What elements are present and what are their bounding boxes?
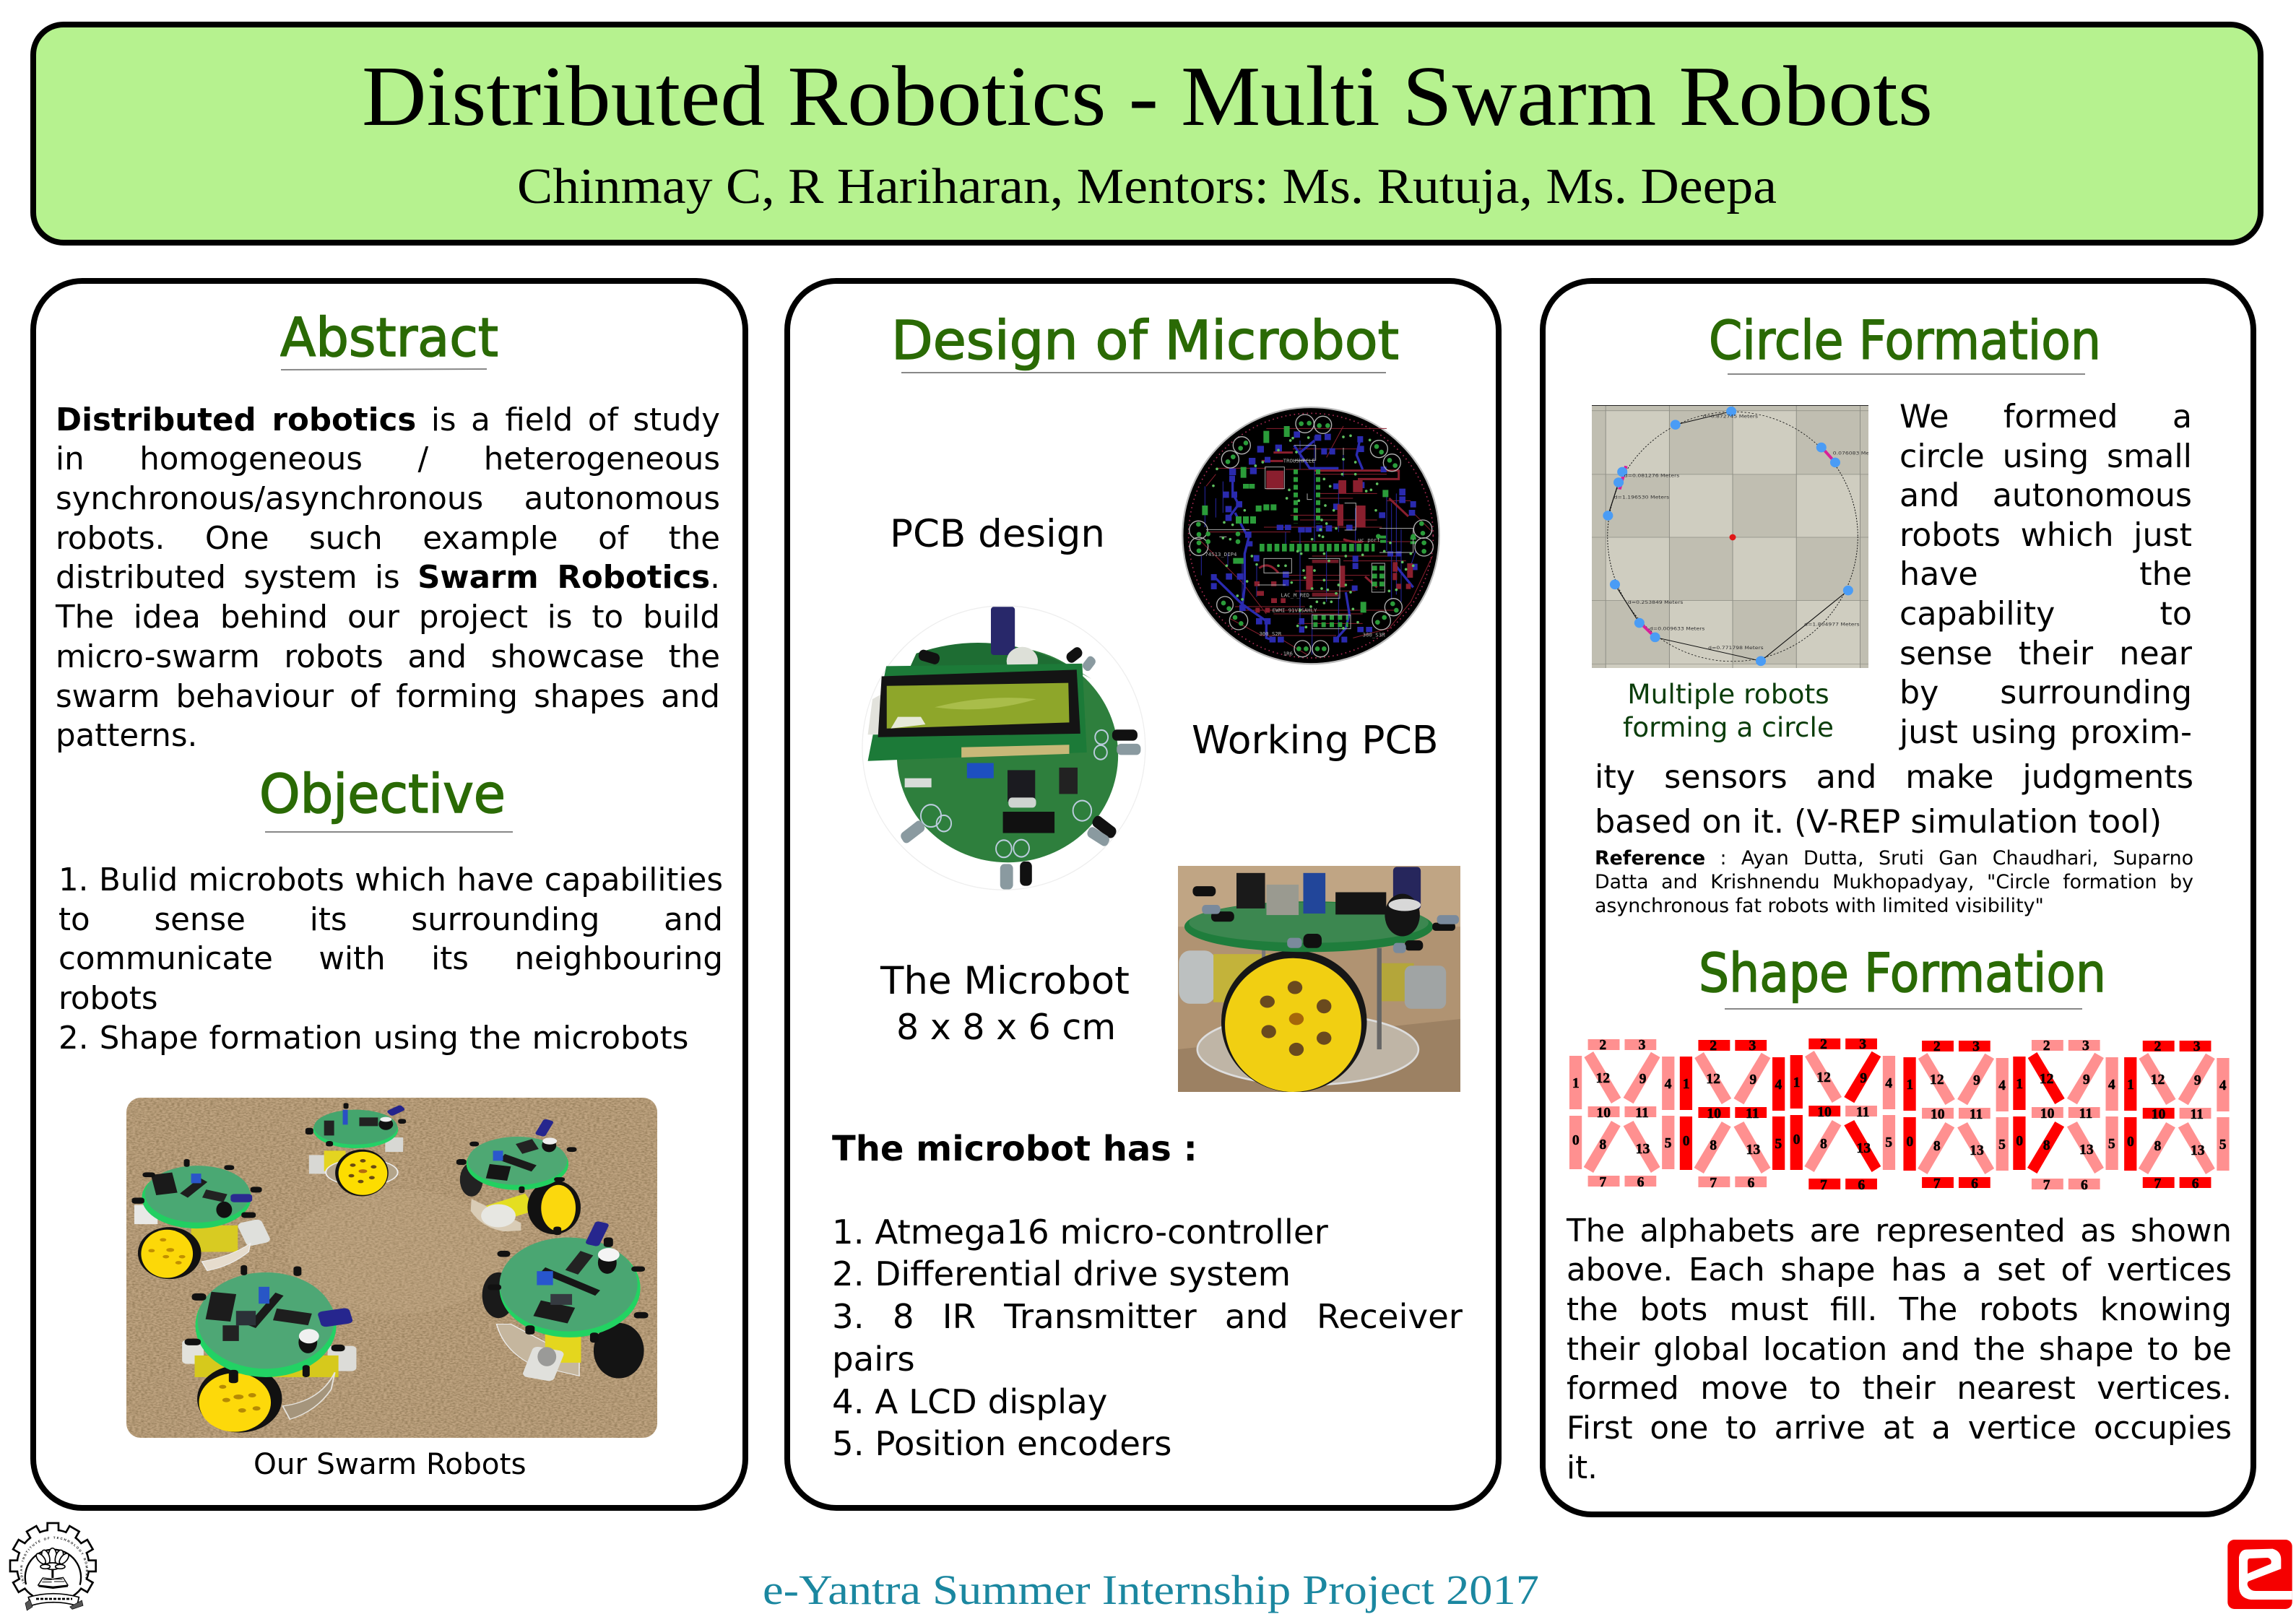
robot bottom left — [182, 1265, 356, 1433]
circle formation text beside image: by surrounding — [1899, 675, 2192, 711]
abstract text: distributed system is Swarm Robotics. — [56, 560, 720, 596]
abstract text: patterns. — [56, 718, 197, 754]
glyph 5: N pattern: 13 — [2079, 1142, 2093, 1158]
glyph 4: C pattern: 5 — [1998, 1137, 2006, 1153]
microbot feature list: 4. A LCD display — [832, 1383, 1107, 1422]
label: the microbot dimensions: 8 x 8 x 6 cm — [896, 1007, 1116, 1048]
glyph 5: N pattern: 0 — [2016, 1133, 2023, 1149]
heading: abstract: Abstract — [280, 307, 498, 369]
glyph 5: N pattern: 9 — [2083, 1072, 2089, 1088]
circle formation text beside image: and autonomous — [1899, 477, 2192, 514]
reference citation: Datta and Krishnendu Mukhopadyay, "Circle formation by — [1595, 871, 2193, 893]
glyph 3: R pattern — [1790, 1036, 1895, 1193]
glyph 4: C pattern: 0 — [1906, 1134, 1913, 1150]
image: circle simulation: d=1.196530 Meters — [1614, 495, 1670, 500]
objective text — [59, 862, 723, 1057]
image: pcb layout: LAC_M_RED — [1281, 592, 1309, 599]
glyph 4: C pattern: 1 — [1906, 1077, 1913, 1093]
caption: multiple robots forming a circle — [1623, 678, 1834, 743]
heading: design of microbot: Design of Microbot — [891, 310, 1399, 372]
image: circle simulation: d=0.253849 Meters — [1628, 600, 1684, 605]
image: pcb layout: 74S13_DIP4 — [1205, 551, 1237, 558]
image: circle simulation: d=1.804977 Meters — [1804, 622, 1860, 627]
glyph 5: N pattern: 4 — [2108, 1077, 2115, 1093]
abstract text: in homogeneous / heterogeneous — [56, 441, 720, 477]
glyph 6: E pattern — [2124, 1038, 2229, 1192]
glyph 1: blank: 11 — [1635, 1105, 1648, 1121]
image: pcb layout: 300_S2R — [1259, 630, 1282, 637]
image: pcb layout: TROUSHPCLE — [1283, 458, 1315, 464]
label: pcb design: PCB design — [890, 512, 1105, 556]
glyph 2: D pattern: 4 — [1775, 1077, 1782, 1093]
glyph 1: blank: 4 — [1664, 1076, 1671, 1092]
image: working pcb with lcd — [862, 605, 1145, 890]
glyph 6: E pattern: 10 — [2151, 1106, 2165, 1122]
glyph 6: E pattern: 5 — [2219, 1137, 2226, 1153]
glyph 3: R pattern: 9 — [1860, 1070, 1867, 1086]
glyph 2: D pattern: 12 — [1706, 1071, 1720, 1087]
glyph 4: C pattern: 9 — [1973, 1072, 1980, 1088]
objective text: 1. Bulid microbots which have capabilities — [59, 862, 723, 898]
glyph 1: blank: 7 — [1599, 1174, 1606, 1190]
shape formation text: it. — [1567, 1450, 1598, 1486]
abstract text: The idea behind our project is to build — [56, 599, 720, 636]
header banner — [30, 22, 2263, 246]
glyph 5: N pattern: 1 — [2016, 1076, 2023, 1092]
robot top right — [456, 1119, 581, 1234]
image: pcb layout: 1R6 — [1283, 650, 1293, 656]
label: the microbot dimensions: The Microbot — [880, 959, 1130, 1003]
circle formation text beside image: capability to — [1899, 596, 2192, 633]
glyph 6: E pattern: 11 — [2190, 1106, 2204, 1122]
glyph 3: R pattern: 5 — [1885, 1135, 1892, 1150]
glyph 1: blank: 13 — [1635, 1141, 1650, 1157]
glyph 1: blank: 8 — [1599, 1137, 1606, 1153]
shape formation text: The alphabets are represented as shown — [1567, 1213, 2232, 1249]
abstract text: Distributed robotics is a field of study — [56, 402, 720, 438]
image: pcb layout: uc port — [1358, 537, 1380, 543]
glyph 4: C pattern: 13 — [1970, 1142, 1984, 1158]
glyph 2: D pattern: 3 — [1749, 1038, 1756, 1054]
circle formation text beside image: circle using small — [1899, 438, 2192, 475]
glyph 1: blank: 12 — [1595, 1070, 1610, 1086]
glyph 4: C pattern — [1903, 1038, 2008, 1192]
glyph 1: blank: 9 — [1639, 1071, 1646, 1087]
glyph 6: E pattern: 8 — [2154, 1138, 2161, 1154]
glyph 2: D pattern — [1679, 1038, 1785, 1191]
glyph 4: C pattern: 4 — [1998, 1077, 2006, 1093]
photo: assembled microbot — [1178, 866, 1460, 1092]
circle formation text beside image: sense their near — [1899, 636, 2192, 672]
footer text: e-Yantra Summer Internship Project 2017 — [763, 1566, 1539, 1613]
glyph 5: N pattern: 2 — [2042, 1038, 2050, 1054]
caption: our swarm robots: Our Swarm Robots — [254, 1447, 527, 1481]
abstract text — [55, 402, 720, 754]
glyph 2: D pattern: 2 — [1710, 1038, 1717, 1054]
glyph 5: N pattern: 3 — [2082, 1038, 2089, 1054]
logo: e-Yantra — [2227, 1540, 2292, 1609]
glyph 3: R pattern: 1 — [1793, 1075, 1800, 1090]
shape formation text: their global location and the shape to be — [1567, 1332, 2232, 1368]
glyph 3: R pattern: 13 — [1856, 1140, 1871, 1156]
abstract text: micro-swarm robots and showcase the — [56, 639, 720, 675]
microbot feature list: 2. Differential drive system — [832, 1255, 1291, 1294]
abstract text: synchronous/asynchronous autonomous — [56, 481, 720, 517]
circle formation text beside image: robots which just — [1899, 517, 2192, 554]
glyph 5: N pattern: 11 — [2079, 1106, 2092, 1122]
microbot feature list: 3. 8 IR Transmitter and Receiver — [832, 1298, 1463, 1337]
glyph 6: E pattern: 3 — [2193, 1038, 2200, 1054]
circle formation text beside image: have the — [1899, 556, 2192, 593]
circle formation text continued: ity sensors and make judgments — [1595, 759, 2193, 796]
glyph 3: R pattern: 8 — [1820, 1136, 1827, 1152]
glyph 2: D pattern: 9 — [1749, 1072, 1756, 1088]
objective text: 2. Shape formation using the microbots — [59, 1020, 689, 1057]
reference citation — [1595, 847, 2193, 917]
glyph 2: D pattern: 11 — [1746, 1106, 1759, 1122]
glyph 2: D pattern: 13 — [1746, 1142, 1760, 1158]
image: circle simulation: d=0.872745 Meters — [1702, 414, 1758, 419]
glyph 3: R pattern: 12 — [1816, 1070, 1831, 1085]
glyph 6: E pattern: 0 — [2127, 1134, 2134, 1150]
objective text: robots — [59, 981, 157, 1017]
photo: swarm robots on carpet — [126, 1098, 657, 1438]
reference citation: asynchronous fat robots with limited visibility" — [1595, 895, 2044, 917]
panel: abstract and objective — [30, 278, 748, 1511]
glyph 4: C pattern: 8 — [1933, 1138, 1940, 1154]
glyph 2: D pattern: 10 — [1707, 1106, 1721, 1122]
title: Distributed Robotics - Multi Swarm Robots — [362, 51, 1933, 144]
caption: multiple robots forming a circle: Multiple robots — [1627, 678, 1829, 710]
glyph 1: blank: 5 — [1664, 1135, 1671, 1151]
glyph 5: N pattern: 8 — [2042, 1137, 2050, 1153]
robot left — [131, 1159, 272, 1279]
glyph 3: R pattern: 0 — [1793, 1132, 1800, 1148]
glyph 6: E pattern: 2 — [2154, 1038, 2161, 1054]
image: pcb layout — [1182, 406, 1440, 664]
robot top centre — [306, 1103, 406, 1196]
image: pcb layout: 300_S3R — [1363, 632, 1385, 638]
glyph 6: E pattern: 1 — [2127, 1077, 2134, 1093]
panel: design of microbot — [784, 278, 1502, 1511]
glyph 6: E pattern: 13 — [2190, 1142, 2204, 1158]
caption: multiple robots forming a circle: forming a circle — [1623, 711, 1834, 743]
glyph 5: N pattern: 10 — [2040, 1106, 2054, 1122]
image: circle simulation: d=0.771798 Meters — [1708, 646, 1764, 651]
glyph 1: blank — [1569, 1037, 1674, 1190]
glyph 1: blank: 0 — [1572, 1132, 1579, 1148]
image: pcb layout: EWMI 91VISAHLY — [1273, 607, 1317, 613]
glyph 4: C pattern: 10 — [1931, 1106, 1944, 1122]
glyph 2: D pattern: 0 — [1682, 1133, 1689, 1149]
circle formation text continued: based on it. (V-REP simulation tool) — [1595, 804, 2162, 841]
glyph 4: C pattern: 2 — [1933, 1038, 1940, 1054]
image: circle simulation: d=0.081276 Meters — [1624, 474, 1680, 478]
chart: segment display alphabets — [1569, 1037, 2230, 1190]
glyph 6: E pattern: 12 — [2150, 1072, 2165, 1088]
glyph 5: N pattern — [2013, 1038, 2118, 1193]
glyph 5: N pattern: 12 — [2039, 1071, 2053, 1087]
glyph 1: blank: 2 — [1599, 1037, 1606, 1053]
microbot feature list: 1. Atmega16 micro-controller — [832, 1213, 1328, 1252]
abstract text: robots. One such example of the — [56, 521, 720, 557]
glyph 2: D pattern: 1 — [1682, 1076, 1689, 1092]
glyph 3: R pattern: 11 — [1856, 1104, 1869, 1120]
circle formation text continued — [1595, 759, 2193, 841]
glyph 1: blank: 1 — [1572, 1075, 1579, 1091]
glyph 6: E pattern: 9 — [2193, 1072, 2201, 1088]
shape formation text: First one to arrive at a vertice occupies — [1567, 1410, 2232, 1447]
reference citation: Reference : Ayan Dutta, Sruti Gan Chaudhari, Suparno — [1595, 847, 2193, 869]
image: circle simulation: d=0.009633 Meters — [1650, 627, 1705, 631]
objective text: to sense its surrounding and — [59, 902, 723, 938]
glyph 4: C pattern: 12 — [1930, 1072, 1944, 1088]
microbot feature list: 5. Position encoders — [832, 1425, 1171, 1464]
logo: IIT Bombay — [9, 1522, 97, 1610]
glyph 2: D pattern: 8 — [1710, 1137, 1717, 1153]
glyph 4: C pattern: 3 — [1972, 1038, 1980, 1054]
subheading: the microbot has: The microbot has : — [832, 1129, 1197, 1169]
label: working pcb: Working PCB — [1192, 717, 1439, 763]
shape formation text — [1566, 1213, 2232, 1486]
glyph 5: N pattern: 5 — [2108, 1136, 2115, 1152]
circle formation text beside image: We formed a — [1899, 399, 2192, 435]
circle formation text beside image — [1899, 399, 2192, 751]
circle formation text beside image: just using proxim- — [1899, 714, 2192, 751]
glyph 1: blank: 6 — [1637, 1174, 1644, 1190]
image: circle simulation — [1592, 405, 1868, 668]
shape formation text: the bots must fill. The robots knowing — [1567, 1292, 2232, 1328]
glyph 2: D pattern: 5 — [1775, 1136, 1782, 1152]
glyph 1: blank: 3 — [1638, 1037, 1645, 1053]
heading: objective: Objective — [259, 763, 506, 825]
objective text: communicate with its neighbouring — [59, 941, 723, 977]
panel: circle and shape formation — [1540, 278, 2256, 1517]
shape formation text: above. Each shape has a set of vertices — [1567, 1252, 2232, 1288]
label: the microbot dimensions — [880, 959, 1130, 1048]
microbot feature list: pairs — [832, 1340, 915, 1379]
abstract text: swarm behaviour of forming shapes and — [56, 679, 720, 715]
glyph 3: R pattern: 10 — [1817, 1104, 1832, 1120]
shape formation text: formed move to their nearest vertices. — [1567, 1371, 2232, 1407]
glyph 1: blank: 10 — [1596, 1105, 1611, 1121]
authors and mentors: Chinmay C, R Hariharan, Mentors: Ms. Rutuja, Ms. Deepa — [517, 159, 1777, 214]
glyph 4: C pattern: 11 — [1969, 1106, 1983, 1122]
logo: IIT Bombay: INDIAN INSTITUTE OF TECHNOLOGY BOMBAY — [20, 1537, 88, 1584]
microbot feature list — [832, 1213, 1463, 1464]
robot bottom right — [482, 1221, 649, 1382]
glyph 6: E pattern: 4 — [2219, 1077, 2226, 1093]
glyph 3: R pattern: 4 — [1885, 1075, 1892, 1091]
